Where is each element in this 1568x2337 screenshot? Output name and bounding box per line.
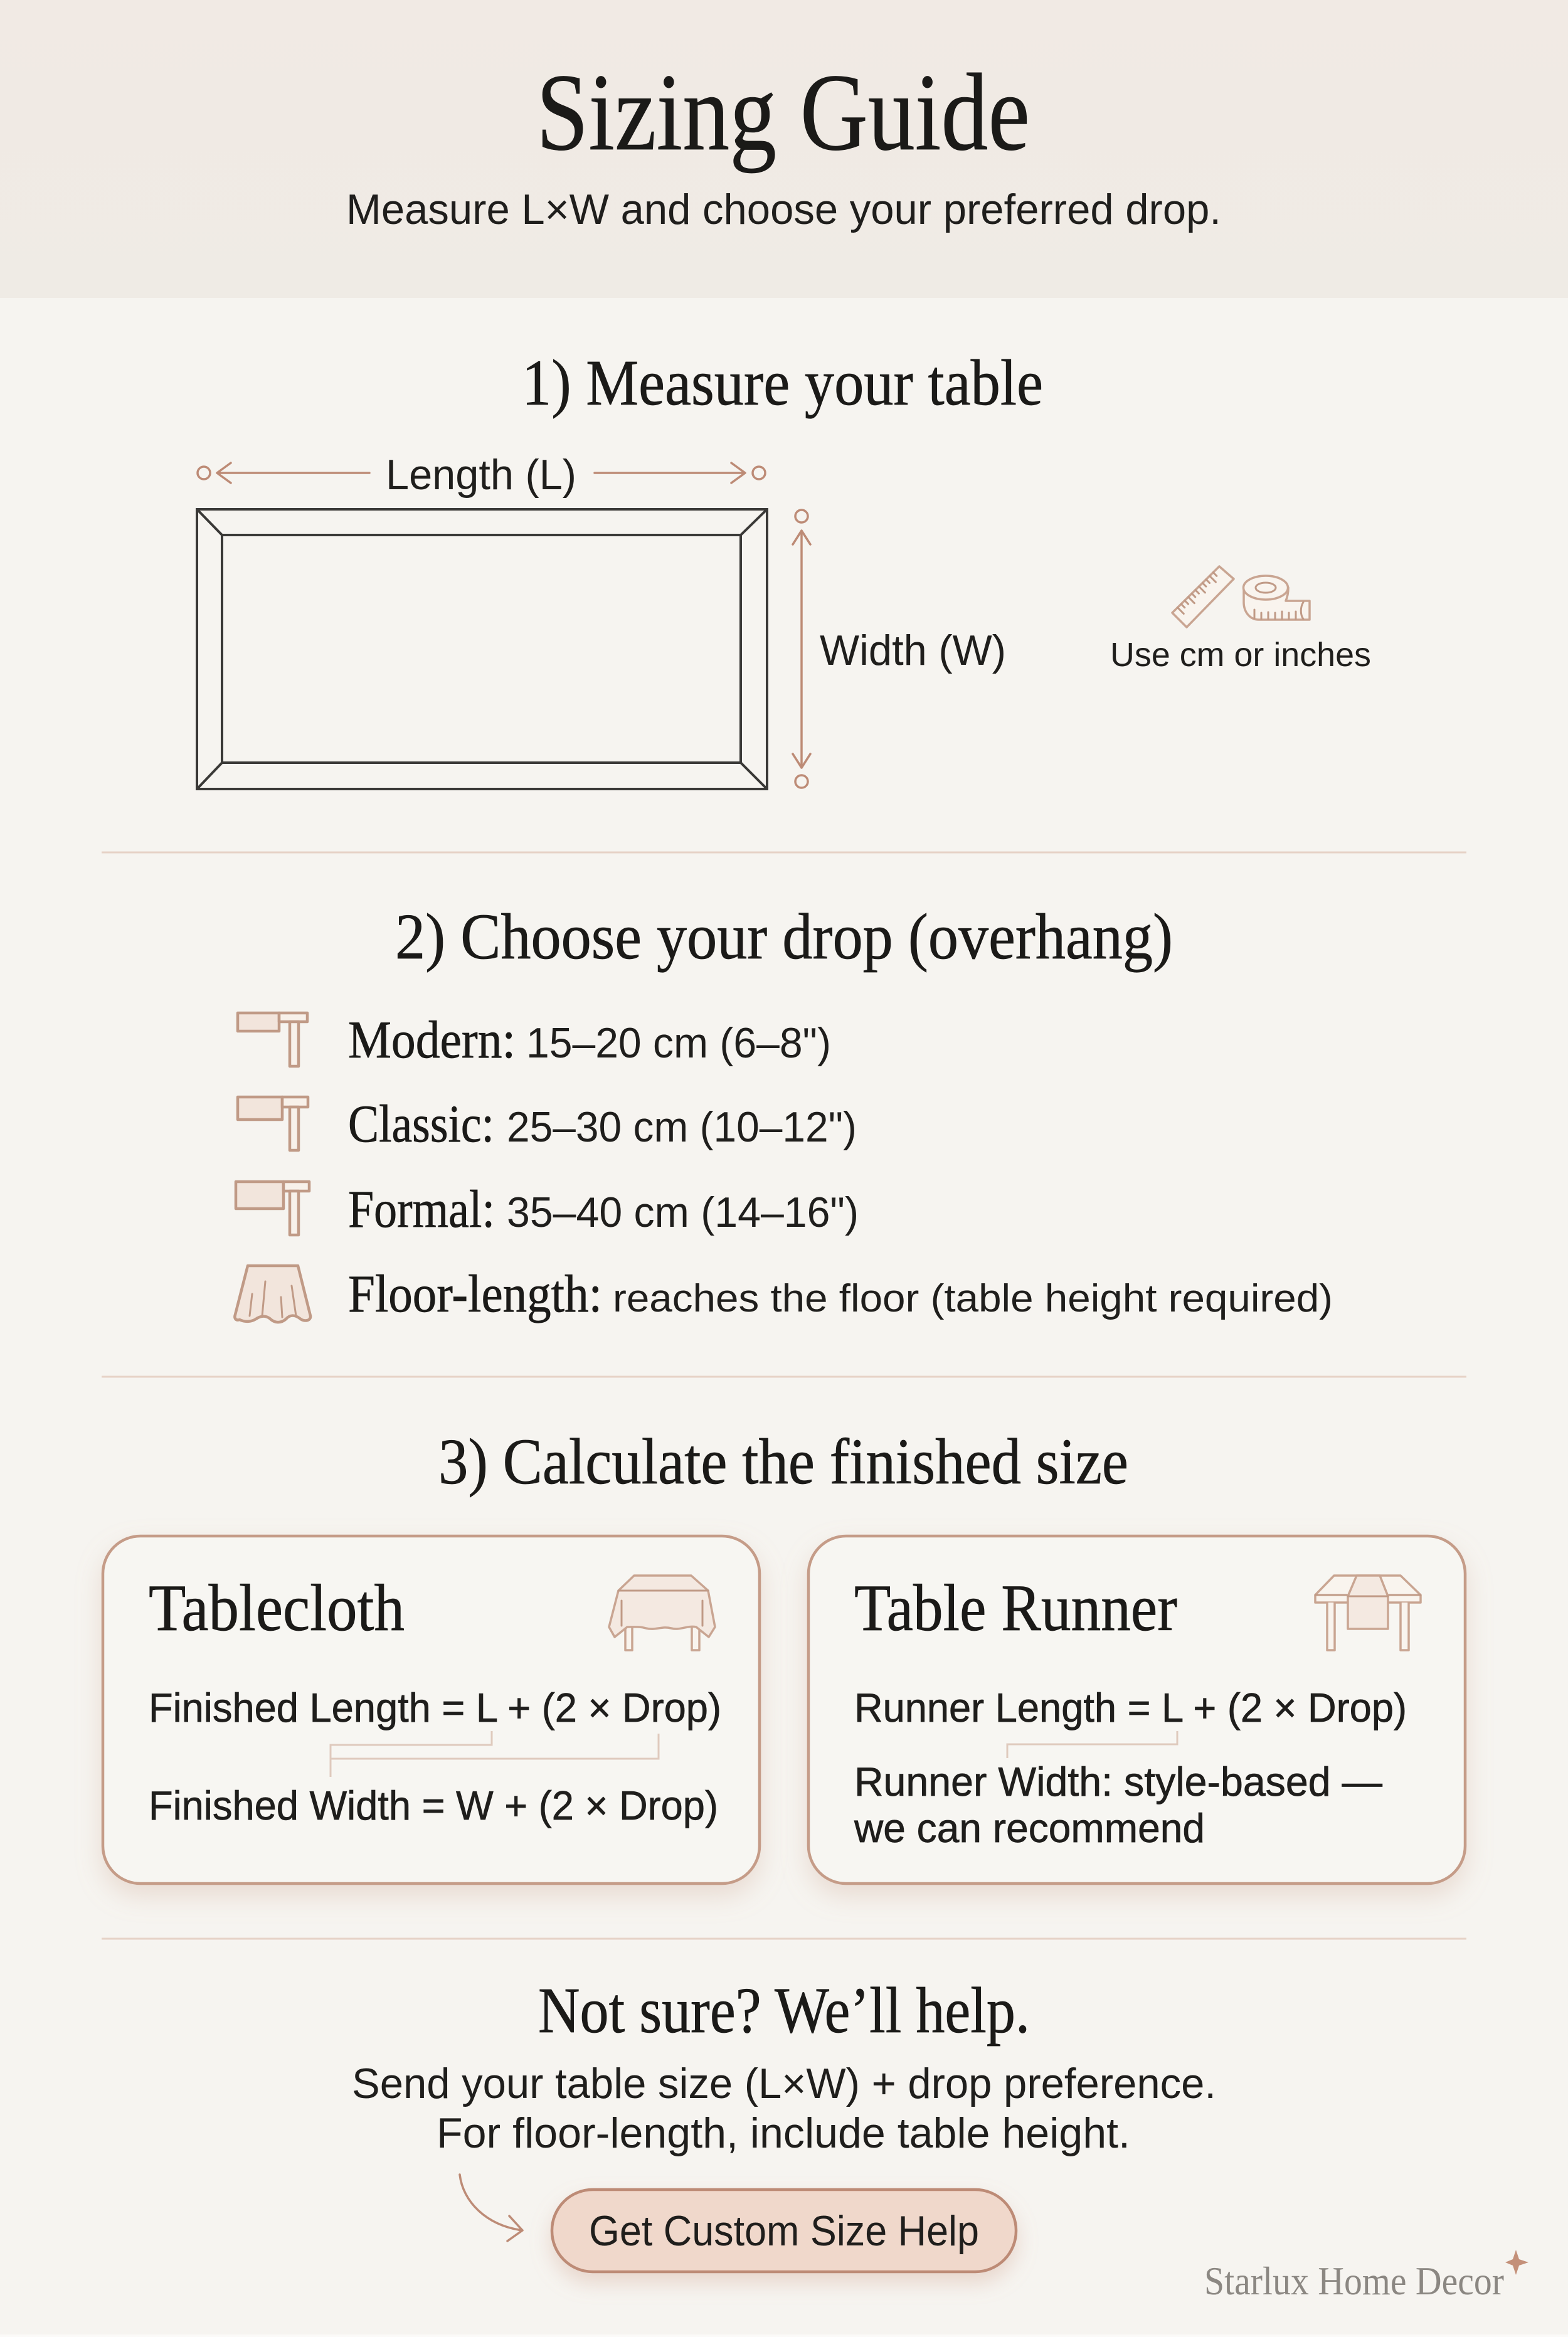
row: formal: 35–40 cm (14–16"): [507, 1189, 859, 1236]
icon: formal drop: [236, 1182, 309, 1235]
note: units: Use cm or inches: [1110, 636, 1371, 674]
row: modern: Modern:: [348, 1010, 516, 1069]
heading: measure: 1) Measure your table: [522, 347, 1043, 419]
help text line 1: Send your table size (L×W) + drop preference.: [352, 2060, 1216, 2107]
icon: classic drop: [238, 1097, 308, 1150]
panel: tablecloth: [103, 1536, 760, 1884]
width dimension: Width (W): [820, 627, 1006, 674]
formula note: we can recommend: [854, 1805, 1205, 1851]
heading: drop: 2) Choose your drop (overhang): [395, 901, 1173, 973]
section 2: choose your drop: [235, 901, 1333, 1323]
card title: tablecloth: Tablecloth: [149, 1571, 405, 1645]
row: formal: [348, 1180, 859, 1239]
section 1: measure your table: [197, 347, 1371, 789]
icon: ruler: [1172, 566, 1234, 627]
arrow to button: [460, 2175, 522, 2241]
header band: [0, 0, 1568, 298]
row: floor-length: Floor-length:: [348, 1264, 602, 1323]
title: Sizing Guide: [536, 51, 1030, 174]
help text line 2: For floor-length, include table height.: [437, 2109, 1130, 2157]
icon: tape measure: [1243, 576, 1310, 620]
row: formal: Formal:: [348, 1180, 495, 1239]
connector line: [1007, 1731, 1177, 1758]
heading: help: Not sure? We’ll help.: [538, 1974, 1030, 2047]
icon: table with runner: [1315, 1576, 1421, 1650]
heading: calculate: 3) Calculate the finished size: [438, 1426, 1128, 1498]
icon: tablecloth: [609, 1576, 715, 1650]
length dimension: [198, 451, 765, 499]
row: classic: Classic:: [348, 1094, 494, 1153]
formula: finished width: Finished Width = W + (2 × Drop): [149, 1783, 718, 1828]
row: floor-length: reaches the floor (table height required): [613, 1277, 1333, 1320]
length dimension: Length (L): [386, 451, 576, 499]
panel: table runner: [808, 1536, 1465, 1884]
row: classic: [348, 1094, 857, 1153]
icon: modern drop: [238, 1013, 307, 1066]
formula: finished length: Finished Length = L + (2 × Drop): [149, 1685, 721, 1730]
width dimension: [793, 510, 1006, 788]
button: [552, 2190, 1016, 2272]
brand mark: Starlux Home Decor: [1204, 2259, 1504, 2303]
row: floor-length: [348, 1264, 1333, 1323]
row: classic: 25–30 cm (10–12"): [507, 1103, 857, 1151]
button: Get Custom Size Help: [589, 2207, 979, 2255]
row: modern: 15–20 cm (6–8"): [526, 1019, 831, 1067]
icon: floor-length skirt: [235, 1266, 310, 1322]
formula: runner width: Runner Width: style-based —: [854, 1759, 1382, 1804]
section 3: calculate: [103, 1426, 1465, 1884]
row: modern: [348, 1010, 831, 1069]
connector lines: [331, 1731, 659, 1777]
section 4: help call to action: [352, 1974, 1528, 2303]
formula: runner length: Runner Length = L + (2 × Drop): [854, 1685, 1407, 1730]
subtitle: Measure L×W and choose your preferred drop.: [346, 186, 1221, 233]
table top diagram: [197, 509, 767, 789]
card title: table runner: Table Runner: [854, 1571, 1177, 1645]
